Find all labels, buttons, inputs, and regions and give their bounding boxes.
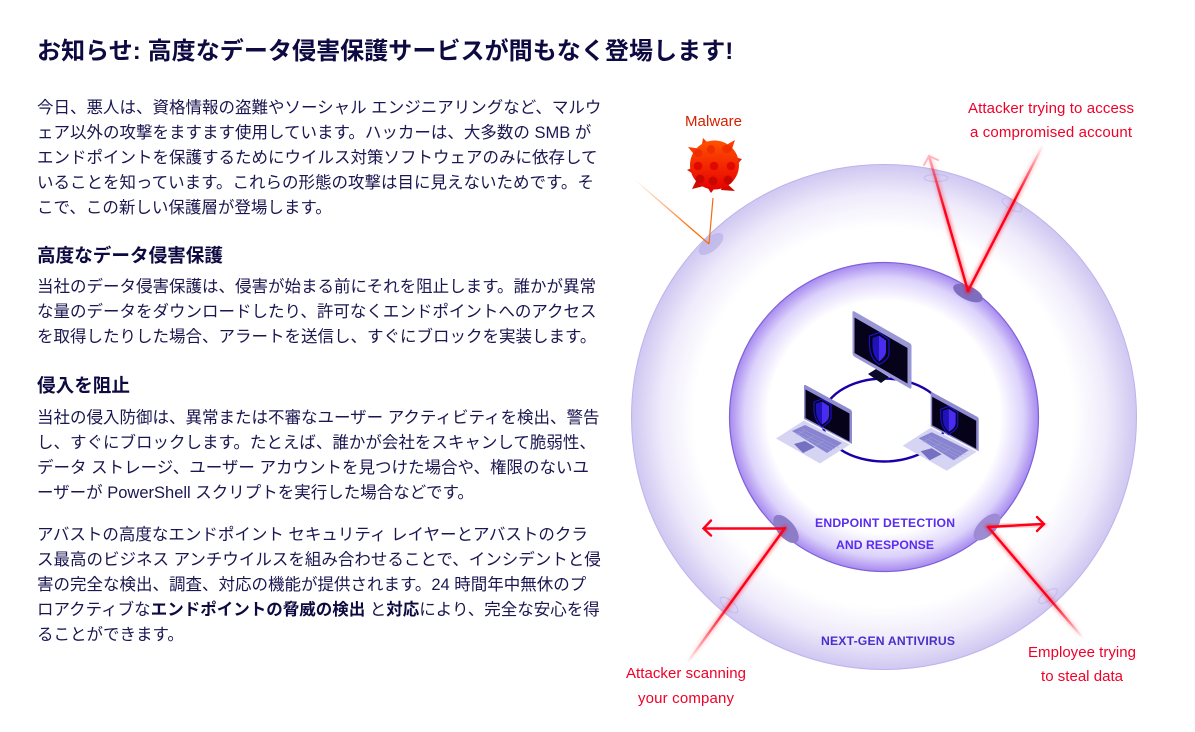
label: attacker trying to access a compromised account: Attacker trying to access [968, 100, 1134, 117]
arrow: attacker scanning deflected at inner ring [687, 520, 785, 663]
network ring connecting devices [822, 378, 946, 462]
text block: introduction: エンドポイントを保護するためにウイルス対策ソフトウェアのみに依存して [37, 149, 598, 167]
label: attacker scanning your company: Attacker scanning [626, 665, 746, 682]
impact spots on rings [695, 174, 1060, 616]
text block: conclusion: 害の完全な検出、調査、対応の機能が提供されます。24 時間年中無休のプ [37, 576, 586, 594]
label: malware: Malware [685, 113, 742, 130]
text block: intrusion prevention [37, 408, 599, 502]
inner ring: endpoint detection and response [730, 262, 1038, 572]
label: employee trying to steal data: Employee trying [1028, 644, 1136, 661]
text block: data breach protection [37, 278, 597, 346]
label: employee trying to steal data [1028, 644, 1136, 685]
label: attacker trying to access a compromised account: a compromised account [970, 124, 1133, 141]
title: お知らせ: 高度なデータ侵害保護サービスが間もなく登場します! [37, 38, 733, 65]
heading: stop intrusions: 侵入を阻止 [37, 375, 130, 396]
label: attacker trying to access a compromised account [968, 100, 1134, 141]
text block: data breach protection: な量のデータをダウンロードしたり、許可なくエンドポイントへのアクセス [37, 303, 597, 321]
text block: data breach protection: を取得したりした場合、アラートを送信し、すぐにブロックを実装します。 [37, 328, 596, 346]
heading: advanced data breach protection: 高度なデータ侵害保護 [37, 245, 223, 266]
text block: introduction: ェア以外の攻撃をますます使用しています。ハッカーは、大多数の SMB が [37, 124, 591, 142]
label: attacker scanning your company [626, 665, 746, 707]
label: employee trying to steal data: to steal data [1041, 668, 1124, 685]
text block: intrusion prevention: し、すぐにブロックします。たとえば、誰かが会社をスキャンして脆弱性、 [37, 434, 596, 452]
text block: conclusion: ス最高のビジネス アンチウイルスを組み合わせることで、インシデントと侵 [37, 551, 601, 569]
icon: desktop monitor [852, 311, 912, 389]
text block: intrusion prevention: ーザーが PowerShell スクリプトを実行した場合などです。 [37, 484, 474, 502]
label: endpoint detection and response: ENDPOINT DETECTION [815, 516, 955, 530]
icon: left laptop [776, 385, 852, 464]
text block: conclusion [37, 526, 601, 644]
label: attacker scanning your company: your company [638, 690, 734, 707]
text block: conclusion: ロアクティブなエンドポイントの脅威の検出 と対応により、完全な安心を得 [37, 601, 600, 619]
text block: intrusion prevention: データ ストレージ、ユーザー アカウントを見つけた場合や、権限のないユ [37, 459, 589, 477]
arrow: attacker deflected at inner ring [924, 145, 1043, 291]
outer ring: next-gen antivirus [632, 164, 1136, 670]
icon: right laptop [903, 392, 979, 471]
icon: malware virus [687, 138, 742, 193]
label: endpoint detection and response: AND RESPONSE [836, 538, 934, 552]
label: next-gen antivirus: NEXT-GEN ANTIVIRUS [821, 634, 955, 648]
text block: conclusion: ることができます。 [37, 626, 184, 644]
arrow: malware deflected at outer ring [635, 180, 713, 244]
text block: introduction [37, 98, 601, 217]
text block: conclusion: アバストの高度なエンドポイント セキュリティ レイヤーとアバストのクラ [37, 526, 588, 544]
text block: intrusion prevention: 当社の侵入防御は、異常または不審なユーザー アクティビティを検出、警告 [37, 409, 599, 427]
text block: introduction: 今日、悪人は、資格情報の盗難やソーシャル エンジニアリングなど、マルウ [37, 99, 601, 117]
text block: introduction: いることを知っています。これらの形態の攻撃は目に見えないためです。そ [37, 174, 594, 192]
text block: introduction: こで、この新しい保護層が登場します。 [37, 199, 332, 217]
label: endpoint detection and response [815, 516, 955, 552]
text block: data breach protection: 当社のデータ侵害保護は、侵害が始まる前にそれを阻止します。誰かが異常 [37, 278, 596, 296]
arrow: employee stealing data deflected at inner ring [988, 517, 1083, 638]
